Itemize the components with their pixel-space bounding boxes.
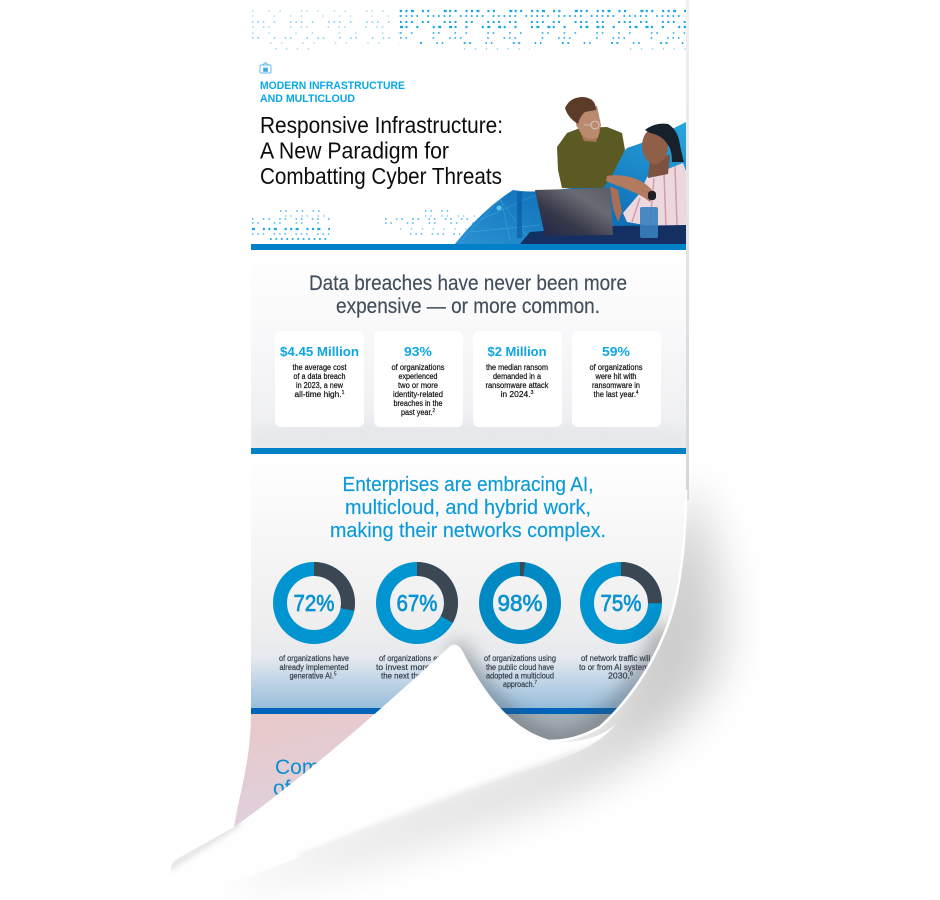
- stat card 2: two or more: [398, 381, 439, 390]
- stat card 1: [275, 346, 364, 427]
- stat card 2: breaches in the: [394, 399, 443, 408]
- lower dot pattern: [252, 211, 480, 239]
- donut caption 1: 5: [334, 672, 337, 678]
- donut caption 3: the public cloud have: [486, 663, 554, 672]
- section rule: [251, 708, 617, 714]
- donut caption 2: the next three years.: [381, 672, 453, 680]
- heading fragment: Com: [275, 756, 319, 779]
- heading: making their networks complex.: [330, 520, 606, 542]
- header dot pattern: [252, 11, 686, 49]
- title: A New Paradigm for: [260, 138, 449, 164]
- page curl flap: [168, 644, 616, 889]
- donut caption 3: adopted a multicloud: [486, 672, 554, 680]
- donut caption 3: approach.: [503, 680, 539, 689]
- stat card 2: identity-related: [393, 390, 443, 399]
- heading: [309, 272, 627, 318]
- donut caption 4: [579, 654, 650, 679]
- donut 75%: [587, 569, 655, 637]
- man: [557, 97, 625, 188]
- title: Combatting Cyber Threats: [260, 163, 502, 189]
- heading: multicloud, and hybrid work,: [345, 497, 591, 519]
- icon: lock: [260, 62, 271, 73]
- title: [260, 112, 503, 189]
- hero photo: [455, 97, 686, 244]
- stat card 3: [473, 346, 562, 427]
- heading: [330, 474, 606, 542]
- stat card 3: demanded in a: [493, 372, 541, 381]
- stat card 4: 4: [636, 390, 639, 396]
- stat card 3: 3: [531, 390, 534, 396]
- section rule: [251, 448, 686, 454]
- stat card 3: $2 Million: [488, 344, 547, 359]
- donut caption 3: [484, 654, 556, 689]
- donut 75%: 75%: [600, 590, 642, 616]
- panel: enterprises: [251, 454, 686, 708]
- curl interior under fold: [506, 714, 612, 740]
- stat card 4: ransomware in: [592, 381, 640, 390]
- stat card 1: of a data breach: [294, 372, 346, 381]
- stat card 1: all-time high.: [294, 390, 340, 399]
- stat card 1: 1: [342, 390, 345, 396]
- stat card 1: the average cost: [292, 363, 347, 372]
- page curl rim: [550, 490, 686, 741]
- stat card 3: ransomware attack: [486, 381, 549, 390]
- drop shadow under page curl: [215, 480, 722, 888]
- donut 72%: 72%: [294, 590, 334, 616]
- stat card 3: in 2024.: [500, 390, 529, 399]
- donut caption 4: of network traffic will go: [581, 654, 662, 663]
- title: Responsive Infrastructure:: [260, 112, 503, 138]
- donut 72%: [280, 569, 348, 637]
- donut caption 1: already implemented: [280, 663, 348, 672]
- donut 67%: [383, 569, 451, 637]
- stat card 2: 2: [432, 408, 435, 414]
- laptop: [535, 188, 613, 236]
- donut caption 1: of organizations have: [279, 654, 349, 663]
- stat card 4: 59%: [602, 344, 630, 359]
- stat card 2: past year.: [401, 408, 436, 417]
- stat card 3: the median ransom: [486, 363, 548, 372]
- donut 98%: 98%: [498, 590, 542, 616]
- infographic page: [225, 0, 686, 834]
- donut caption 1: generative AI.: [290, 672, 338, 680]
- page edge shadow: [686, 0, 689, 500]
- donut caption 4: 8: [630, 672, 633, 678]
- donut caption 2: of organizations expect: [379, 654, 456, 663]
- stat card 2: 93%: [404, 344, 432, 359]
- heading: expensive — or more common.: [336, 295, 600, 318]
- donut caption 1: [279, 654, 349, 680]
- donut caption 3: 7: [535, 680, 537, 686]
- woman: [606, 124, 686, 227]
- stat card 1: in 2023, a new: [296, 381, 343, 390]
- stat card 4: the last year.: [594, 390, 639, 399]
- category label: [260, 82, 405, 102]
- donut caption 2: [376, 654, 438, 679]
- stat card 4: [572, 347, 661, 427]
- heading: Enterprises are embracing AI,: [342, 474, 594, 496]
- panel: bottom section: [234, 714, 374, 827]
- stat card 4: were hit with: [595, 372, 636, 381]
- donut 98%: [486, 569, 554, 637]
- heading fragment: of: [273, 777, 291, 800]
- panel: data breaches: [251, 274, 686, 448]
- heading: Data breaches have never been more: [309, 272, 627, 295]
- stat card 2: [374, 347, 463, 427]
- table: [520, 225, 686, 244]
- donut caption 2: to invest more in AI in: [376, 663, 458, 672]
- header rule: [251, 244, 686, 250]
- stat card 1: $4.45 Million: [280, 344, 359, 359]
- donut 67%: 67%: [396, 590, 438, 616]
- donut caption 4: to or from AI systems by: [579, 663, 663, 672]
- category label: AND MULTICLOUD: [260, 93, 355, 105]
- donut caption 3: of organizations using: [484, 654, 556, 663]
- stat card 2: experienced: [398, 372, 438, 381]
- stat card 4: of organizations: [590, 363, 642, 372]
- glass: [640, 207, 658, 238]
- donut caption 4: 2030.: [608, 672, 628, 680]
- stat card 2: of organizations: [392, 363, 444, 372]
- category label: MODERN INFRASTRUCTURE: [260, 80, 405, 92]
- blue network wave: [455, 122, 686, 244]
- heading fragment: [274, 760, 317, 795]
- curl shading: [455, 627, 667, 741]
